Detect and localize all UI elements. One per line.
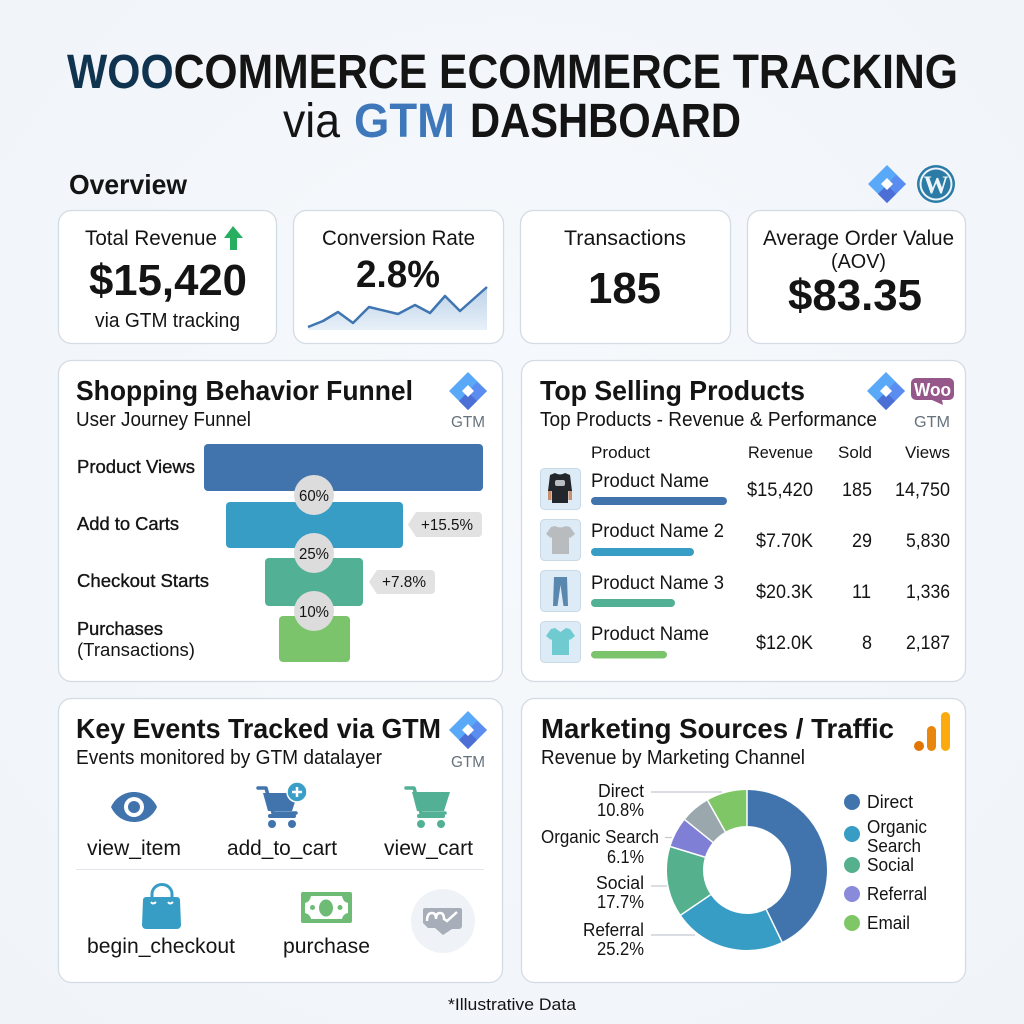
funnel chart: 25% bbox=[299, 546, 329, 563]
panel: total revenue: $15,420 bbox=[89, 256, 247, 305]
callout: +15.5% bbox=[408, 512, 482, 537]
panel: total revenue bbox=[58, 210, 276, 344]
table row 2: $7.70K bbox=[756, 531, 813, 552]
legend bbox=[844, 791, 927, 933]
donut labels: Direct bbox=[598, 780, 644, 801]
callout: +7.8% bbox=[369, 570, 435, 594]
donut labels: Referral bbox=[583, 919, 644, 940]
title: via bbox=[283, 95, 340, 148]
funnel chart bbox=[204, 444, 483, 662]
panel: shopping behavior funnel bbox=[58, 360, 502, 682]
panel: transactions: 185 bbox=[588, 264, 661, 313]
table row 4: Product Name bbox=[591, 624, 709, 645]
panel: key events tracked: GTM bbox=[451, 754, 485, 771]
icon: up arrow bbox=[224, 226, 243, 250]
panel: key events tracked: Key Events Tracked via GTM bbox=[76, 713, 441, 744]
panel: top selling products: Top Selling Products bbox=[540, 375, 805, 406]
title: DASHBOARD bbox=[470, 95, 741, 148]
icon: jeans bbox=[553, 577, 568, 606]
event: begin_checkout bbox=[87, 885, 235, 958]
event: begin_checkout: begin_checkout bbox=[87, 935, 235, 958]
icon: analytics bars bbox=[914, 712, 950, 751]
table row 2: 5,830 bbox=[906, 531, 950, 552]
icon: GTM logo bbox=[867, 372, 905, 410]
panel: marketing sources bbox=[522, 698, 966, 982]
panel: average order value: (AOV) bbox=[831, 251, 886, 273]
icon: WordPress logo bbox=[917, 165, 955, 203]
donut chart bbox=[670, 790, 809, 942]
legend: Social bbox=[867, 854, 914, 875]
table row 2 bbox=[540, 520, 950, 560]
panel: total revenue: via GTM tracking bbox=[95, 310, 240, 332]
panel: transactions: Transactions bbox=[564, 227, 686, 250]
funnel labels: (Transactions) bbox=[77, 640, 195, 660]
heading: overview: Overview bbox=[69, 169, 187, 200]
event: view_item bbox=[87, 792, 181, 860]
funnel labels: Product Views bbox=[77, 457, 195, 477]
panel: top selling products: Top Products - Revenue & Performance bbox=[540, 409, 877, 431]
table header bbox=[591, 443, 950, 462]
callout: +7.8%: +7.8% bbox=[382, 574, 426, 591]
table header: Product bbox=[591, 443, 650, 462]
event: add_to_cart bbox=[227, 782, 337, 860]
legend: Email bbox=[867, 912, 910, 933]
donut labels bbox=[541, 780, 659, 959]
donut labels: 6.1% bbox=[607, 846, 644, 867]
event: view_item: view_item bbox=[87, 837, 181, 860]
table row 3: $20.3K bbox=[756, 582, 813, 603]
table row 3 bbox=[540, 570, 950, 612]
panel: total revenue: Total Revenue bbox=[85, 227, 217, 250]
panel: top selling products bbox=[522, 360, 966, 682]
event: purchase: purchase bbox=[283, 935, 370, 958]
panel: average order value bbox=[748, 210, 966, 344]
donut labels: 10.8% bbox=[597, 799, 644, 820]
table row 4 bbox=[540, 622, 950, 662]
legend: Referral bbox=[867, 883, 927, 904]
table row 3: 11 bbox=[852, 582, 871, 603]
funnel labels: Purchases bbox=[77, 619, 163, 639]
footnote: *Illustrative Data bbox=[448, 995, 577, 1014]
table row 3: Product Name 3 bbox=[591, 573, 724, 594]
funnel labels: Checkout Starts bbox=[77, 571, 209, 591]
legend: Organic bbox=[867, 816, 927, 837]
table row 4: 8 bbox=[862, 633, 872, 654]
legend: Search bbox=[867, 835, 921, 856]
event: purchase bbox=[283, 892, 370, 958]
funnel labels: Add to Carts bbox=[77, 514, 179, 534]
legend: Direct bbox=[867, 791, 913, 812]
icon: GTM logo bbox=[449, 711, 487, 749]
icon: Woo badge bbox=[911, 378, 954, 405]
table row 1 bbox=[540, 468, 950, 510]
event: add_to_cart: add_to_cart bbox=[227, 837, 337, 860]
donut labels: 17.7% bbox=[597, 891, 644, 912]
table row 1: Product Name bbox=[591, 471, 709, 492]
table header: Revenue bbox=[748, 443, 813, 462]
title: GTM bbox=[354, 95, 455, 148]
icon: WordPress logo: W bbox=[924, 172, 948, 199]
funnel labels bbox=[77, 457, 209, 660]
panel: average order value: $83.35 bbox=[788, 271, 922, 320]
panel: shopping behavior funnel: Shopping Behavior Funnel bbox=[76, 375, 413, 406]
donut labels: 25.2% bbox=[597, 938, 644, 959]
table row 2: Product Name 2 bbox=[591, 521, 724, 542]
icon: grey t-shirt bbox=[546, 526, 575, 554]
panel: marketing sources: Marketing Sources / Traffic bbox=[541, 713, 894, 744]
table header: Views bbox=[905, 443, 950, 462]
table row 1: $15,420 bbox=[747, 480, 813, 501]
icon: GTM logo bbox=[449, 372, 487, 410]
panel: conversion rate: Conversion Rate bbox=[322, 227, 475, 250]
panel: conversion rate bbox=[294, 210, 504, 344]
table row 3: 1,336 bbox=[906, 582, 950, 603]
icon: black t-shirt bbox=[548, 473, 572, 503]
table row 1: 185 bbox=[842, 480, 872, 501]
panel: shopping behavior funnel: User Journey Funnel bbox=[76, 409, 251, 431]
title bbox=[67, 46, 958, 148]
funnel chart: 10% bbox=[299, 604, 329, 621]
panel: average order value: Average Order Value bbox=[763, 227, 954, 250]
icon: grey event badge bbox=[411, 889, 475, 953]
panel: top selling products: GTM bbox=[914, 414, 950, 431]
panel: key events tracked bbox=[58, 698, 502, 982]
table row 2: 29 bbox=[852, 531, 872, 552]
table row 4: 2,187 bbox=[906, 633, 950, 654]
table header: Sold bbox=[838, 443, 872, 462]
icon: teal polo bbox=[546, 628, 575, 655]
line chart: conversion trend bbox=[308, 287, 487, 330]
table row 4: $12.0K bbox=[756, 633, 813, 654]
funnel chart: 60% bbox=[299, 488, 329, 505]
panel: transactions bbox=[520, 210, 730, 344]
donut labels: Social bbox=[596, 872, 644, 893]
table row 1: 14,750 bbox=[895, 480, 950, 501]
panel: key events tracked: Events monitored by GTM datalayer bbox=[76, 747, 382, 769]
icon: GTM logo bbox=[868, 165, 906, 203]
event: view_cart: view_cart bbox=[384, 837, 473, 860]
panel: marketing sources: Revenue by Marketing Channel bbox=[541, 747, 805, 769]
panel: shopping behavior funnel: GTM bbox=[451, 414, 485, 431]
callout: +15.5%: +15.5% bbox=[421, 517, 473, 534]
event: view_cart bbox=[384, 788, 473, 860]
panel: conversion rate: 2.8% bbox=[356, 254, 440, 296]
icon: Woo badge: Woo bbox=[914, 380, 951, 400]
donut labels: Organic Search bbox=[541, 826, 659, 847]
